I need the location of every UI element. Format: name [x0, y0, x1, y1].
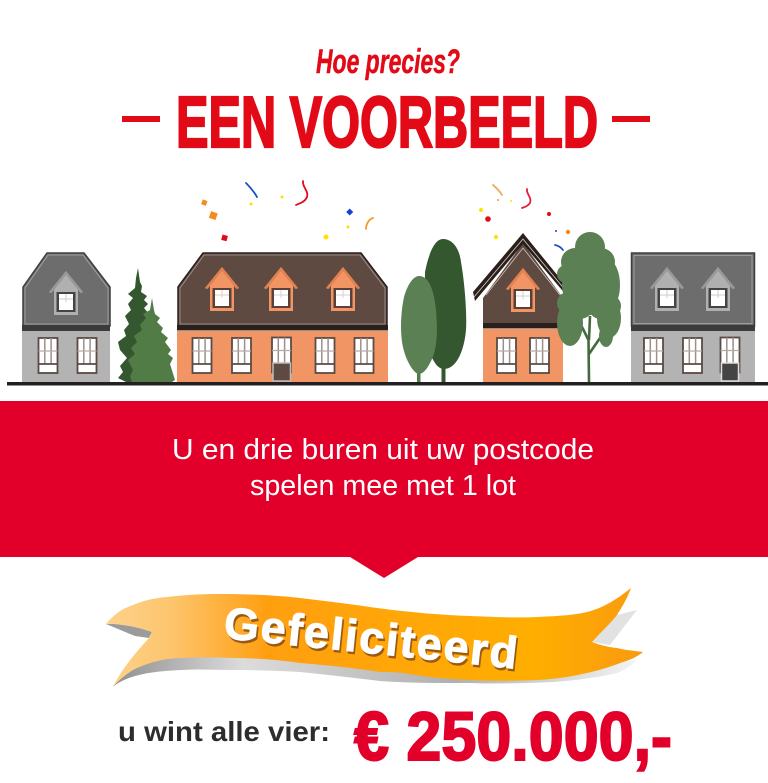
- tree: broad leaf: [557, 232, 621, 382]
- ribbon: [106, 588, 643, 687]
- red panel: [0, 401, 768, 578]
- ground line: [7, 382, 768, 386]
- prize label: u wint alle vier:: [118, 716, 330, 747]
- house: left grey: [22, 253, 110, 382]
- house: right grey: [631, 253, 755, 382]
- ribbon text: Gefeliciteerd: [226, 608, 517, 669]
- trees: poplars: [401, 239, 466, 382]
- ribbon text: Gefeliciteerd: [228, 614, 518, 672]
- trees: spruces: [118, 268, 175, 382]
- prize amount: € 250.000,-: [354, 698, 672, 775]
- house: orange small: [473, 233, 567, 382]
- panel text: spelen mee met 1 lot: [250, 470, 516, 502]
- panel text: U en drie buren uit uw postcode: [172, 434, 594, 466]
- subtitle: Hoe precies?: [316, 43, 460, 81]
- house: orange large: [177, 253, 388, 382]
- panel text: [172, 434, 594, 502]
- confetti: [201, 181, 570, 250]
